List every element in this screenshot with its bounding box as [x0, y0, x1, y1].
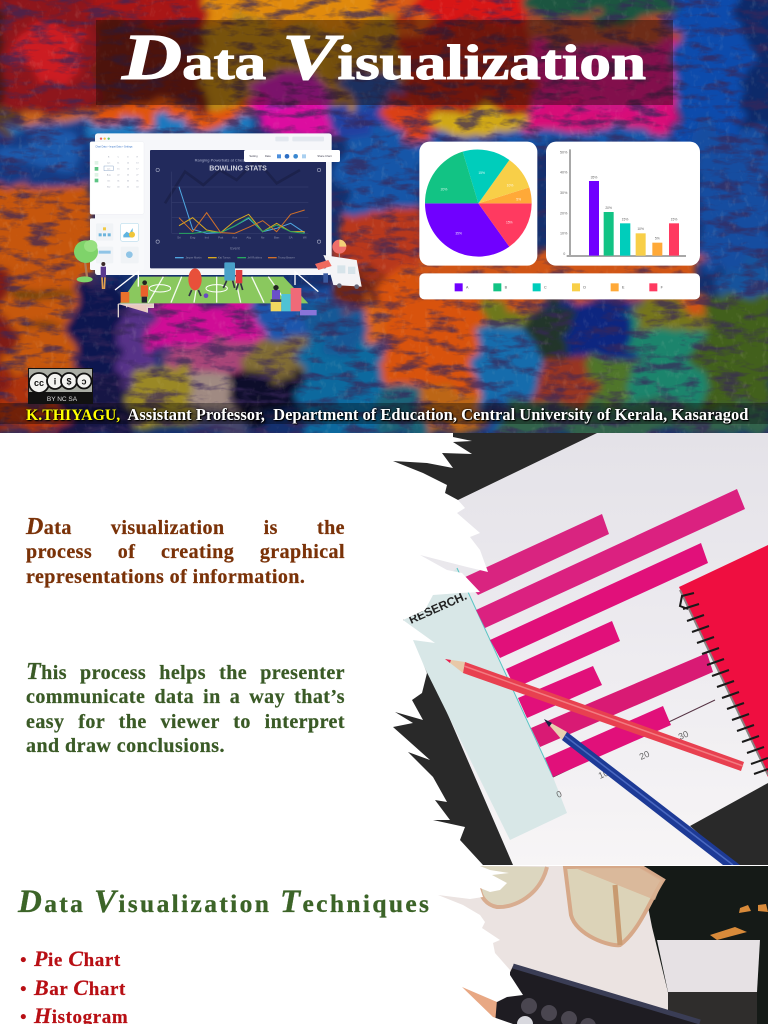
bar chart: 20% — [605, 206, 612, 210]
pie chart: 10% — [507, 184, 513, 188]
calendar card: Jun — [107, 169, 110, 171]
photo: bar chart printout, pencils and notebook: RESERCH. — [407, 589, 469, 627]
calendar card: 33 — [127, 181, 130, 183]
calendar card: 25 — [127, 175, 130, 177]
toolbar: Setting — [249, 154, 258, 158]
bar chart: 15% — [622, 217, 628, 221]
calendar card — [90, 142, 144, 214]
pie chart: 35% — [455, 232, 462, 236]
chart panel: bowling stats: SA — [289, 235, 293, 239]
list: techniques — [20, 946, 128, 1024]
tree — [74, 240, 98, 282]
chart panel: bowling stats: Nz — [261, 235, 265, 239]
bar chart: 35% — [591, 175, 597, 179]
calendar card: Jan — [107, 163, 110, 165]
red notebook — [679, 545, 768, 777]
chart panel: bowling stats: WI — [303, 235, 307, 239]
chart panel: bowling stats: Ban — [274, 235, 280, 239]
torn white brush edge — [430, 866, 523, 1024]
calendar card: Nov — [107, 186, 110, 188]
chart panel: bowling stats: Eng — [190, 235, 196, 239]
calendar card: 16 — [127, 169, 130, 171]
panel: pie chart card — [419, 142, 537, 266]
top left reds — [0, 0, 115, 125]
illustration: dashboard with bowling stats — [74, 133, 362, 317]
icon: creative commons badge: BY NC SA — [47, 396, 78, 403]
bar chart: 10% — [560, 232, 568, 236]
toolbar: Share Chart — [317, 154, 332, 158]
food truck — [315, 240, 362, 289]
panel: chart legend: C — [544, 286, 547, 290]
text block: definition: process of creating graphical — [26, 541, 345, 563]
toolbar — [244, 150, 340, 162]
chart panel: bowling stats: Kat Tomos — [218, 256, 231, 260]
panel: bar chart card — [546, 142, 700, 266]
glasses — [480, 866, 663, 945]
text block: purpose — [26, 659, 345, 757]
photo: bar chart printout, pencils and notebook — [380, 433, 768, 865]
chart panel: bowling stats: Afg — [246, 235, 251, 239]
list: techniques: • — [20, 979, 27, 1000]
text block: purpose: and draw conclusions. — [26, 735, 225, 757]
calendar card: D — [127, 157, 129, 159]
calendar card: 44 — [136, 186, 139, 188]
icon: creative commons badge: i — [54, 376, 56, 386]
chart panel: bowling stats: Event — [230, 246, 240, 250]
red pencil — [445, 659, 744, 771]
toolbar: Data — [265, 154, 271, 158]
calendar card: 31 — [117, 181, 119, 183]
football field — [115, 272, 318, 303]
chart panel: bowling stats — [150, 150, 326, 268]
chart panel: bowling stats: Ind — [205, 235, 209, 239]
browser window — [95, 133, 332, 275]
list: techniques: Bar Chart — [34, 975, 126, 1000]
pie chart: 15% — [478, 171, 485, 175]
mini bars: 3D blocks — [271, 288, 317, 315]
bar chart — [560, 149, 686, 257]
right of dashboard — [340, 135, 420, 220]
icon: creative commons badge: cc — [34, 378, 44, 388]
pie chart — [425, 150, 532, 257]
panel: chart legend: F — [661, 286, 664, 290]
bar chart: 50% — [560, 150, 568, 154]
chart panel: bowling stats: Jeff Robbins — [247, 256, 263, 260]
icon: creative commons badge: $ — [66, 376, 72, 386]
list: techniques: Pie Chart — [34, 946, 121, 971]
bar chart: 0 — [563, 252, 565, 256]
left edge — [0, 128, 92, 188]
calendar card: 40 — [117, 186, 120, 188]
blue pencil — [544, 719, 740, 865]
panel: title band — [96, 20, 673, 105]
text block: definition — [26, 514, 345, 588]
strip under title — [0, 105, 35, 137]
bar chart: 30% — [560, 191, 568, 195]
title: Data Visualization — [121, 21, 646, 94]
white paper sheet — [438, 866, 668, 1010]
peach desk corner — [462, 987, 497, 1018]
calendar card: 15 — [117, 169, 120, 171]
calendar card: 12 — [127, 163, 129, 165]
text block: purpose: This process helps the presenter — [26, 659, 345, 685]
text block: definition: representations of information. — [26, 566, 305, 588]
chart panel: bowling stats: Sri — [177, 235, 181, 239]
bar chart: 15% — [671, 217, 677, 221]
calendar card: E — [137, 157, 139, 159]
list: techniques: • — [20, 950, 27, 971]
chart panel: bowling stats: Ranging Powerbats at Chest — [195, 158, 246, 163]
chart panel: bowling stats: Trump Beaver — [278, 256, 295, 260]
characters — [101, 262, 281, 317]
calendar card: 35 — [136, 181, 139, 183]
bar chart: 40% — [560, 171, 568, 175]
panel: chart legend: D — [583, 286, 586, 290]
pie chart: 5% — [516, 197, 521, 201]
chart type tiles — [90, 218, 144, 270]
panel: chart legend: A — [466, 286, 469, 290]
panel: credit band — [0, 403, 768, 424]
printed sheet — [407, 433, 768, 865]
photo: bar chart printout, pencils and notebook: 30 — [677, 729, 690, 742]
photo: bar chart printout, pencils and notebook: 10 — [597, 768, 610, 781]
photo: bar chart printout, pencils and notebook: 0 — [555, 789, 563, 800]
torn white brush edge — [380, 433, 488, 865]
calendar card: Aug — [107, 174, 110, 177]
bar chart: 20% — [560, 211, 568, 215]
calendar card: B — [108, 157, 110, 159]
panel: painted hero background — [0, 0, 768, 440]
phone — [495, 966, 700, 1024]
text block: purpose: easy for the viewer to interpret — [26, 711, 345, 733]
photo: glasses and phone on desk — [430, 866, 768, 1024]
calendar card: Oct — [107, 180, 111, 183]
calendar card: 22 — [117, 175, 119, 177]
bar chart: 5% — [655, 237, 660, 241]
icon: creative commons badge: ɔ — [81, 376, 87, 386]
calendar card: 42 — [127, 186, 129, 188]
text block: purpose: communicate data in a way that’s — [26, 686, 345, 708]
calendar card: C — [118, 157, 120, 159]
calendar card: Chart Data > Import Data > Settings — [95, 146, 133, 149]
pink bars — [463, 489, 745, 777]
panel: chart legend: E — [622, 286, 625, 290]
photo: bar chart printout, pencils and notebook: 20 — [638, 749, 651, 762]
panel: chart legend — [419, 273, 700, 299]
chart panel: bowling stats: Pak — [218, 235, 224, 239]
calendar card: 13 — [136, 163, 139, 165]
calendar card: 17 — [136, 169, 138, 171]
calendar card: 11 — [117, 163, 119, 165]
panel: chart legend: B — [505, 286, 508, 290]
bottom centre — [118, 310, 163, 385]
pie chart: 20% — [441, 188, 447, 192]
chart panel: bowling stats: Jasper Martin — [185, 256, 202, 260]
chart panel: bowling stats: Aus — [232, 235, 238, 239]
pie chart: 15% — [506, 220, 513, 224]
heading: techniques: Data Visualization Techniques — [18, 884, 431, 920]
text block: definition: Data visualization is the — [26, 514, 345, 540]
calendar card: 27 — [136, 175, 138, 177]
teal margin strip — [402, 568, 567, 840]
bar chart: 10% — [637, 227, 644, 231]
icon: creative commons badge — [28, 368, 93, 404]
chart panel: bowling stats: BOWLING STATS — [209, 166, 267, 173]
credit line: K.THIYAGU, Assistant Professor, Department of Education, Central University of Kerala, Kasaragod — [26, 405, 748, 424]
